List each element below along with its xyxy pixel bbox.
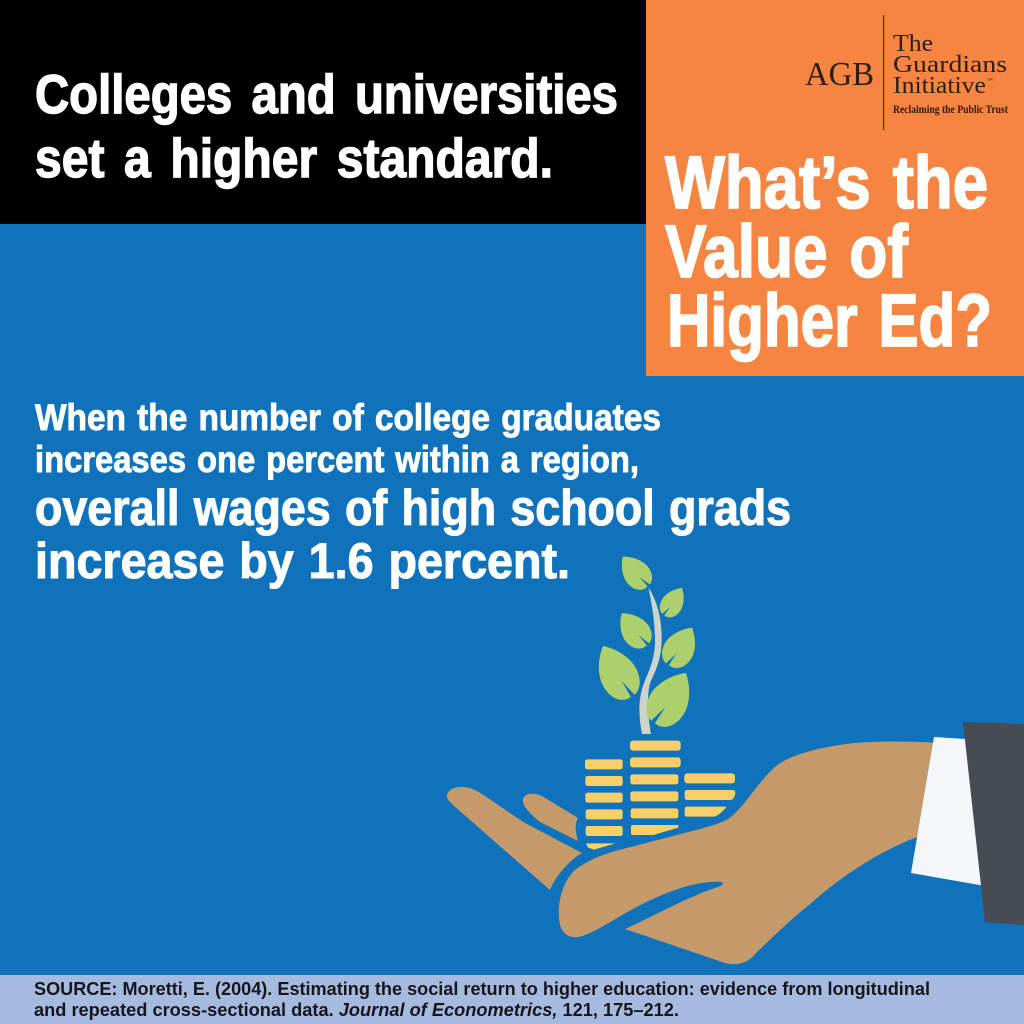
plant leaves (587, 548, 705, 735)
logo: AGB Guardians Initiative: Guardians (893, 52, 1007, 78)
logo: AGB Guardians Initiative: Initiative (893, 73, 986, 99)
logo: AGB Guardians Initiative: The (893, 31, 933, 57)
icon: plant (587, 548, 705, 735)
logo: AGB Guardians Initiative: AGB (805, 56, 874, 93)
heading: colleges and universities: set a higher standard. (35, 127, 553, 189)
band: source citation (0, 975, 1024, 1024)
title: what's the value of higher ed (665, 141, 992, 362)
sleeve (963, 722, 1024, 925)
cuff (911, 737, 985, 886)
plant stem (639, 587, 662, 734)
panel: black headline (0, 0, 646, 224)
citation text: and repeated cross-sectional data. Journal of Econometrics, 121, 175–212. (34, 1000, 679, 1020)
title: what's the value of higher ed: Value of (665, 210, 908, 293)
text block: statistic (35, 397, 791, 589)
small finger (523, 794, 578, 841)
text block: statistic: increases one percent within a region, (35, 439, 639, 480)
icon: coin stacks (585, 741, 735, 850)
heading: colleges and universities: Colleges and universities (35, 63, 618, 125)
icon: hand holding coins (447, 722, 1024, 964)
heading: colleges and universities (35, 63, 618, 189)
finger (447, 787, 582, 890)
palm and arm (559, 742, 940, 964)
panel: orange title (646, 0, 1024, 376)
text block: statistic: When the number of college graduates (35, 397, 661, 438)
text block: statistic: increase by 1.6 percent. (35, 533, 570, 589)
text block: statistic: overall wages of high school grads (35, 480, 791, 536)
citation text: SOURCE: Moretti, E. (2004). Estimating the social return to higher education: evidence from longitudinal (34, 979, 930, 999)
logo: AGB Guardians Initiative (805, 15, 1008, 130)
citation text (34, 979, 930, 1020)
logo: AGB Guardians Initiative: ™ (987, 78, 993, 84)
